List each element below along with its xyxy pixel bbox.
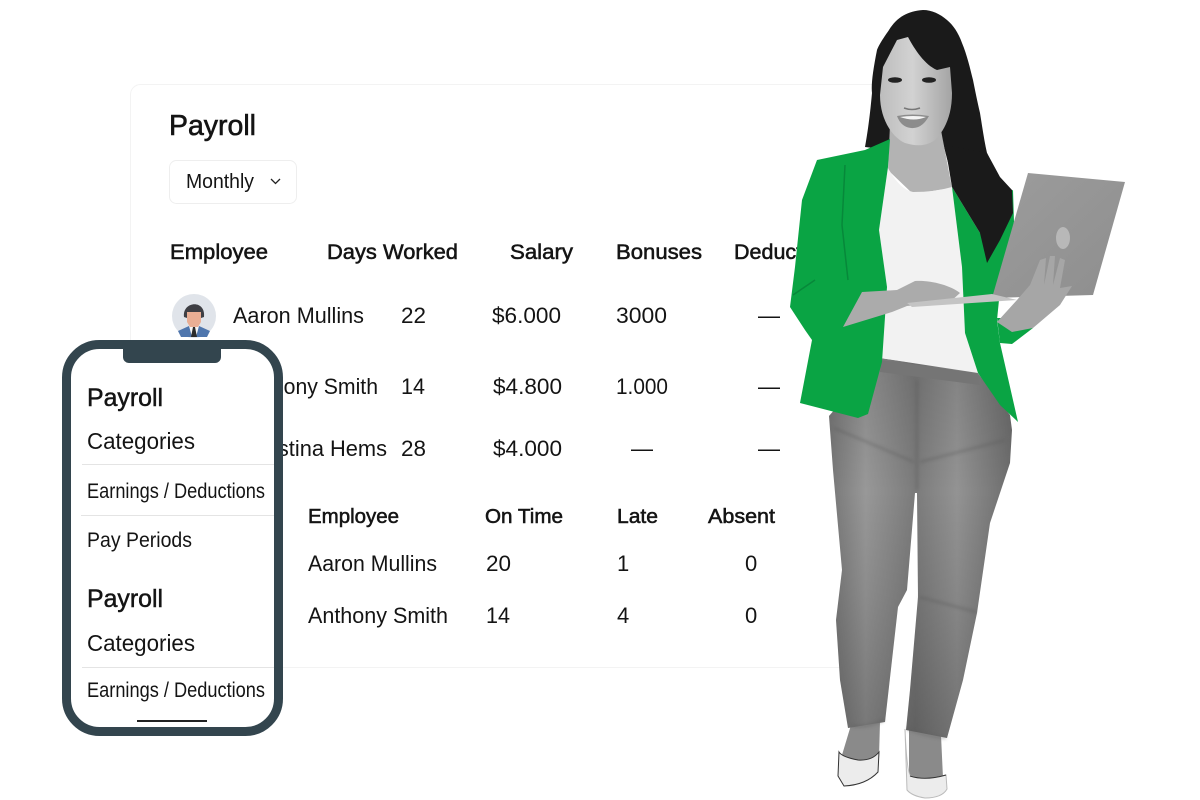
jeans waistband: [880, 360, 980, 385]
row: Anthony Smith: —: [758, 374, 780, 399]
blazer right cuff: [997, 318, 1033, 344]
row: Aaron Mullins: 3000: [616, 303, 667, 328]
table header: payroll columns: [170, 240, 842, 264]
attendance row: Anthony Smith: 14: [486, 603, 510, 628]
laptop base: [907, 294, 1017, 307]
table header: attendance columns: [308, 505, 775, 528]
hair back: [865, 10, 998, 200]
row: Aaron Mullins: 22: [401, 303, 426, 328]
attendance row: Aaron Mullins: 20: [486, 551, 511, 576]
attendance row: Anthony Smith: 4: [617, 603, 629, 628]
jeans shading: [829, 358, 1012, 738]
table header: payroll columns: Salary: [510, 240, 573, 264]
table header: payroll columns: Employee: [170, 240, 268, 264]
dropdown: Monthly: Monthly: [186, 170, 255, 193]
phone menu text: Earnings / Deductions: [87, 678, 265, 702]
row: Cristina Hems: —: [631, 436, 653, 461]
row: Cristina Hems: —: [758, 436, 780, 461]
figure: woman with green blazer and laptop: [790, 10, 1125, 798]
table header: attendance columns: Late: [617, 505, 658, 528]
table header: attendance columns: Absent: [708, 505, 775, 528]
laptop logo: [1056, 227, 1070, 249]
laptop lid: [992, 173, 1125, 298]
right hand: [997, 256, 1072, 332]
heading: Payroll: Payroll: [169, 110, 256, 142]
jeans: [829, 358, 1012, 738]
attendance row: Anthony Smith: 0: [745, 603, 757, 628]
phone home bar: [137, 720, 207, 722]
attendance row: Aaron Mullins: [308, 551, 757, 576]
row: Cristina Hems: [250, 436, 780, 461]
nose and lips: [904, 108, 920, 110]
phone menu text: Categories: [87, 428, 195, 454]
face: [880, 37, 952, 145]
table header: attendance columns: Employee: [308, 505, 399, 528]
panel: payroll dashboard card: [130, 84, 890, 668]
row: Anthony Smith: [240, 374, 780, 399]
row: Cristina Hems: 28: [401, 436, 426, 461]
blazer right panel: [952, 187, 1018, 422]
table header: payroll columns: Deductions: [734, 240, 842, 264]
neck: [888, 125, 952, 194]
row: Aaron Mullins: —: [758, 303, 780, 328]
shoes: [838, 729, 947, 798]
attendance row: Anthony Smith: [308, 603, 757, 628]
phone menu text: Payroll: [87, 585, 163, 613]
row: Anthony Smith: Anthony Smith: [240, 374, 378, 399]
jeans folds: [834, 380, 1005, 738]
phone menu text: [81, 384, 274, 702]
row: Aaron Mullins: $6.000: [492, 303, 561, 328]
row: Cristina Hems: Cristina Hems: [250, 436, 387, 461]
row: Anthony Smith: 14: [401, 374, 425, 399]
attendance row: Aaron Mullins: 1: [617, 551, 629, 576]
phone menu text: Categories: [87, 630, 195, 656]
table header: payroll columns: Days Worked: [327, 240, 458, 264]
phone menu text: Pay Periods: [87, 528, 192, 552]
row: Anthony Smith: 1.000: [616, 374, 668, 399]
phone menu text: Earnings / Deductions: [87, 479, 265, 503]
phone notch: [123, 344, 221, 363]
eyes: [888, 77, 936, 83]
table header: attendance columns: On Time: [485, 505, 563, 528]
row: Aaron Mullins: Aaron Mullins: [233, 303, 364, 328]
hair lock over blazer: [945, 145, 1013, 263]
row: Cristina Hems: $4.000: [493, 436, 562, 461]
attendance row: Anthony Smith: Anthony Smith: [308, 603, 448, 628]
left forearm and hand: [843, 281, 960, 327]
attendance row: Aaron Mullins: 0: [745, 551, 757, 576]
white shirt: [879, 168, 978, 373]
phone mockup: [66, 344, 278, 732]
avatar: Aaron Mullins: [172, 294, 216, 338]
attendance row: Aaron Mullins: Aaron Mullins: [308, 551, 437, 576]
table header: payroll columns: Bonuses: [616, 240, 702, 264]
phone menu text: Payroll: [87, 384, 163, 412]
dropdown: Monthly: [170, 160, 296, 204]
blazer left panel: [790, 139, 890, 418]
row: Aaron Mullins: [233, 303, 780, 328]
ankles: [842, 722, 943, 781]
row: Anthony Smith: $4.800: [493, 374, 562, 399]
